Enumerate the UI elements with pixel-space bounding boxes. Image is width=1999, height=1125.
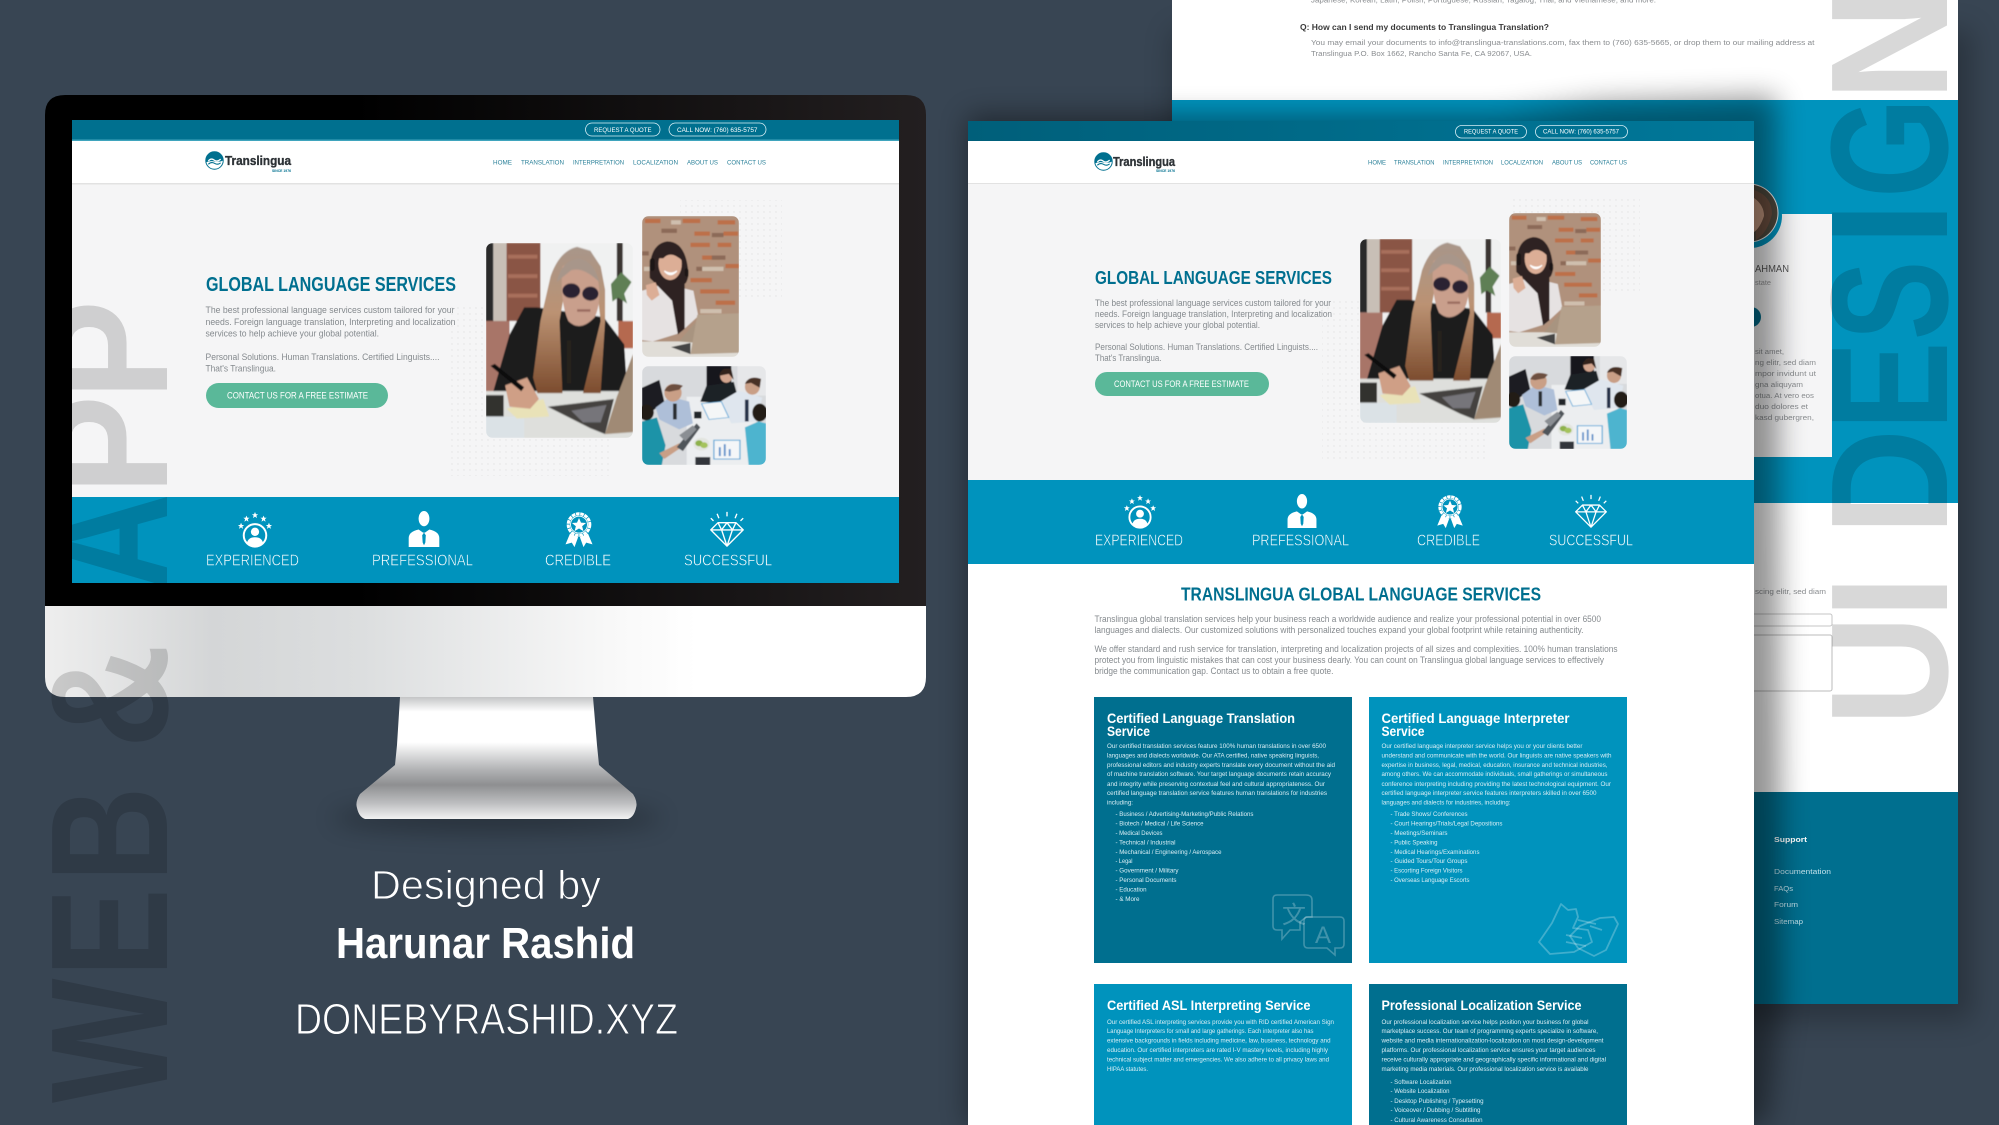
card: certified language translation: languages and dialects worldwide. Our ATA certified, native speaking linguists, [1107, 752, 1319, 760]
icon: experienced [238, 512, 272, 547]
card: certified language interpreter: - Trade Shows/ Conferences [1390, 811, 1468, 818]
top bar: CALL NOW: (760) 635-5757 [677, 127, 758, 134]
hero text: The best professional language services custom tailored for your [206, 305, 454, 315]
feature labels [1095, 532, 1633, 550]
card: certified ASL interpreting: extensive backgrounds in fields including medicine, law, business, technology and [1107, 1038, 1331, 1044]
card: certified language interpreter: Our certified language interpreter service helps you or your clients better [1382, 743, 1583, 750]
card: professional localization: Our professional localization service helps position your business for global [1382, 1019, 1588, 1026]
hero [72, 183, 899, 497]
hero text [1095, 298, 1332, 363]
hero [968, 184, 1754, 480]
watermark: UI DESIGN: E [1795, 341, 1982, 430]
FAQ text on back page [1300, 0, 1815, 58]
testimonial card: gna aliquyam [1755, 382, 1803, 389]
footer support links: FAQs [1774, 884, 1793, 893]
feature labels: SUCCESSFUL [1549, 532, 1633, 550]
card: professional localization: website and media internationalization-localization on most design-development [1381, 1038, 1604, 1044]
monitor stand [356, 697, 637, 819]
FAQ text on back page: Q: How can I send my documents to Translingua Translation? [1300, 22, 1549, 32]
feature labels: CREDIBLE [1417, 532, 1480, 550]
logo: SINCE 1976 [1156, 169, 1175, 173]
hero text: needs. Foreign language translation, Interpreting and localization [1095, 309, 1332, 319]
card: certified language interpreter: - Meetings/Seminars [1390, 830, 1448, 837]
hero text: Personal Solutions. Human Translations. Certified Linguists.... [206, 352, 440, 362]
section intro text: We offer standard and rush service for translation, interpreting and localization projects of all sizes and complexities. 100% human translations [1094, 644, 1618, 654]
text: designed by: Designed by [371, 862, 601, 908]
card: certified language translation: - Medical Devices [1116, 830, 1162, 837]
card: certified ASL interpreting: HIPAA statutes. [1107, 1066, 1148, 1073]
icon: experienced [1124, 495, 1156, 528]
feature band [72, 497, 899, 583]
feature labels: PREFESSIONAL [1252, 532, 1349, 550]
feature labels: EXPERIENCED [1095, 532, 1183, 550]
panel: front web page mockup [968, 121, 1754, 1125]
card: certified language translation: - Personal Documents [1116, 877, 1176, 884]
hero heading: GLOBAL LANGUAGE SERVICES [206, 273, 456, 296]
card: professional localization: Professional Localization Service [1382, 998, 1582, 1013]
card: certified language translation: professional editors and industry experts translate every document without the aid [1107, 762, 1335, 769]
footer support links: Documentation [1774, 867, 1831, 876]
panel: back web page mockup [1172, 0, 1972, 1020]
contact form [1700, 587, 1832, 691]
navigation: HOME [493, 160, 513, 167]
text: designer name: Harunar Rashid [336, 919, 635, 968]
card: certified language translation: - & More [1116, 896, 1140, 903]
hero text: That's Translingua. [1095, 353, 1162, 363]
feature labels: CREDIBLE [545, 552, 611, 570]
navigation: INTERPRETATION [573, 160, 624, 167]
testimonial card: state [1755, 278, 1771, 287]
navigation: CONTACT US [727, 160, 767, 167]
card: certified language interpreter: understand and communicate with the world. Our linguists are native speakers with [1382, 752, 1612, 760]
card: certified language interpreter: - Court Hearings/Trials/Legal Depositions [1390, 820, 1502, 828]
card: certified ASL interpreting: Our certified ASL interpreting services provide you with RID certified American Sign [1107, 1019, 1334, 1026]
watermark: WEB & APP: & [17, 644, 203, 748]
top bar [72, 120, 899, 141]
hero button: CONTACT US FOR A FREE ESTIMATE [1114, 379, 1249, 389]
hero button [206, 383, 388, 408]
front page shadow [968, 96, 1782, 1125]
card: certified language interpreter: languages and dialects for industries, including: [1382, 800, 1511, 806]
photo: interpreter with headset [642, 216, 739, 357]
card: certified language translation: - Legal [1116, 858, 1132, 865]
card: certified language interpreter: certified language interpreter service features interpreters skilled in over 6500 [1382, 790, 1597, 797]
hero text [206, 305, 456, 374]
photo: woman at laptop [486, 243, 633, 438]
hero text: The best professional language services custom tailored for your [1095, 298, 1331, 308]
card: certified language translation: Certified Language Translation [1107, 711, 1295, 726]
watermark: UI DESIGN [1795, 0, 1983, 726]
testimonial card: otua. At vero eos [1755, 393, 1815, 400]
icon: translate speech bubbles: 文 [1282, 902, 1306, 929]
watermark: WEB & APP: P [17, 300, 203, 400]
hero text: needs. Foreign language translation, Interpreting and localization [206, 317, 456, 327]
section intro text: protect you from linguistic mistakes that can cost your business dearly. You can count on Translingua global language services to effectively [1094, 655, 1604, 665]
FAQ text on back page: Translingua P.O. Box 1662, Rancho Santa Fe, CA 92067, USA. [1311, 51, 1532, 58]
watermark: UI DESIGN: U [1797, 615, 1983, 726]
footer support links: Sitemap [1774, 917, 1803, 926]
card: certified language translation: Our certified translation services feature 100% human translations in over 6500 [1107, 743, 1326, 750]
card: certified language interpreter: conference interpreting including providing the latest technological equipment. Our [1382, 781, 1612, 788]
section intro text: bridge the communication gap. Contact us to obtain a free quote. [1094, 666, 1334, 676]
text: website: DONEBYRASHID.XYZ [295, 995, 678, 1044]
card: professional localization: - Cultural Awareness Consultation [1390, 1117, 1483, 1124]
section intro text: Translingua global translation services help your business reach a worldwide audience and realize your professional potential in over 6500 [1094, 614, 1601, 624]
testimonial card: duo dolores et [1755, 404, 1808, 411]
navigation: ABOUT US [1552, 160, 1583, 166]
card: certified language translation: Service [1107, 724, 1150, 739]
feature band [968, 480, 1754, 564]
navigation: TRANSLATION [521, 160, 564, 167]
navigation: LOCALIZATION [633, 160, 678, 167]
card: certified ASL interpreting: education. Our certified interpreters are rated I-V mastery levels, including highly [1107, 1047, 1329, 1054]
card: certified language interpreter: expertise in business, legal, medical, education, insurance and technical industries, [1382, 762, 1608, 769]
watermark: WEB & APP: A [17, 494, 203, 590]
watermark: WEB & APP: B [16, 787, 203, 882]
hero heading: GLOBAL LANGUAGE SERVICES [1095, 268, 1332, 288]
monitor chin [45, 606, 926, 697]
watermark: UI DESIGN: S [1796, 261, 1983, 340]
navigation [493, 160, 767, 167]
card: certified ASL interpreting: Certified ASL Interpreting Service [1107, 998, 1311, 1013]
logo: Translingua [1113, 155, 1176, 169]
card: certified language translation: - Technical / Industrial [1116, 840, 1176, 846]
card: certified language interpreter [1369, 697, 1627, 963]
photo: team meeting [639, 366, 767, 465]
watermark: UI DESIGN: I [1796, 202, 1983, 246]
screen: website home page [72, 120, 899, 583]
photo: interpreter with headset [1509, 213, 1601, 347]
hero text: services to help achieve your global potential. [206, 328, 379, 338]
card: certified language translation: - Mechanical / Engineering / Aerospace [1116, 849, 1222, 856]
card: professional localization: - Website Localization [1390, 1088, 1450, 1095]
hero text: That's Translingua. [206, 364, 276, 374]
logo: SINCE 1976 [272, 169, 291, 173]
feature labels: EXPERIENCED [206, 552, 299, 570]
card: certified language translation: - Business / Advertising-Marketing/Public Relations [1116, 811, 1254, 818]
card: professional localization [1369, 984, 1627, 1125]
card: certified language interpreter: - Public Speaking [1390, 840, 1438, 846]
navigation: ABOUT US [687, 160, 719, 167]
top bar: CALL NOW: (760) 635-5757 [1543, 129, 1619, 136]
card: certified language translation: - Government / Military [1116, 868, 1179, 874]
card: certified language interpreter: Certified Language Interpreter [1382, 711, 1570, 726]
icon: professional [1288, 494, 1316, 528]
logo: Translingua [225, 154, 292, 168]
navigation [1368, 160, 1628, 166]
card: professional localization: - Voiceover / Dubbing / Subtitling [1390, 1107, 1481, 1114]
card: certified ASL interpreting [1094, 984, 1352, 1125]
watermark: WEB & APP: W [16, 978, 203, 1103]
card: professional localization: marketplace success. Our team of programming experts specialize in software, [1382, 1028, 1598, 1035]
hero button: CONTACT US FOR A FREE ESTIMATE [227, 390, 368, 400]
logo [1095, 153, 1176, 173]
monitor bezel [45, 95, 926, 606]
icon: successful [1576, 495, 1606, 527]
testimonial card [1700, 184, 1832, 457]
feature labels: SUCCESSFUL [684, 552, 772, 570]
card: professional localization: marketing media materials. Our professional localization service is available [1382, 1066, 1589, 1073]
card: certified language interpreter: - Medical Hearings/Examinations [1390, 849, 1480, 856]
card: certified language interpreter: - Guided Tours/Tour Groups [1390, 858, 1468, 865]
watermark: UI DESIGN: D [1797, 429, 1983, 535]
footer support links [1774, 835, 1831, 926]
icon: signing hands [1539, 904, 1618, 956]
photo: woman at laptop [1360, 239, 1501, 423]
hero text: services to help achieve your global potential. [1095, 320, 1260, 330]
card: certified language translation: - Education [1116, 886, 1147, 894]
navigation: TRANSLATION [1394, 160, 1435, 166]
avatar [1718, 184, 1782, 248]
watermark: WEB & APP: P [17, 395, 203, 494]
card: certified language translation: certified language translation service features human translations for industries [1107, 790, 1327, 797]
section intro text: languages and dialects. Our customized solutions with personalized touches expand your global footprint while retaining authenticity. [1094, 625, 1584, 635]
testimonial card: kasd gubergren, [1755, 415, 1814, 422]
designer credit [295, 862, 678, 1044]
icon: translate speech bubbles [1273, 895, 1344, 955]
hero button [1095, 372, 1269, 396]
footer support links: Forum [1774, 900, 1798, 909]
icon: translate speech bubbles: A [1315, 922, 1331, 949]
card: certified language interpreter: - Overseas Language Escorts [1390, 877, 1470, 884]
top bar: REQUEST A QUOTE [594, 127, 652, 134]
card: certified language translation: and integrity while preserving contextual feel and cultural appropriateness. Our [1107, 781, 1326, 788]
watermark: WEB & APP [15, 300, 203, 1103]
watermark: UI DESIGN: I [1796, 575, 1983, 619]
watermark: UI DESIGN: G [1796, 98, 1983, 198]
testimonial card: mpor invidunt ut [1755, 371, 1816, 378]
card: certified language translation: of machine translation software. Your target language documents retain accuracy [1107, 771, 1332, 778]
card: professional localization: - Desktop Publishing / Typesetting [1390, 1098, 1484, 1105]
card: professional localization: - Software Localization [1390, 1079, 1452, 1086]
feature labels [206, 552, 772, 570]
card: certified ASL interpreting: Language Interpreters for small and large gatherings. Each interpreter also has [1107, 1028, 1314, 1035]
card: certified ASL interpreting: technical subject matter and emergencies. We also adhere to all privacy laws and [1107, 1056, 1329, 1064]
photo: team meeting [1506, 356, 1628, 449]
icon: credible [1437, 497, 1463, 528]
top bar: REQUEST A QUOTE [1464, 129, 1519, 136]
footer support links: Support [1774, 835, 1808, 844]
top bar [968, 121, 1754, 141]
section intro text [1094, 614, 1618, 676]
icon: credible [566, 514, 592, 547]
FAQ text on back page: You may email your documents to info@translingua-translations.com, fax them to (760) 635-5665, or drop them to our mailing address at [1311, 40, 1815, 47]
card: certified language interpreter: among others. We can accommodate individuals, small gatherings or simultaneous [1382, 771, 1608, 778]
testimonial card: AHMAN [1755, 264, 1789, 275]
contact form: scing elitr, sed diam [1755, 587, 1826, 596]
icon: successful [711, 512, 743, 546]
card: professional localization: platforms. Our professional localization service ensures your target audiences [1382, 1047, 1596, 1054]
watermark: WEB & APP: E [15, 888, 202, 977]
logo [206, 152, 292, 173]
icon: professional [409, 511, 439, 547]
card: professional localization: receive culturally appropriate and geographically specific informational and digital [1382, 1056, 1606, 1064]
card: certified language translation: - Biotech / Medical / Life Science [1116, 820, 1204, 828]
section heading: TRANSLINGUA GLOBAL LANGUAGE SERVICES [1181, 584, 1541, 605]
navigation: LOCALIZATION [1501, 160, 1543, 166]
card: certified language interpreter: - Escorting Foreign Visitors [1390, 868, 1462, 874]
hero text: Personal Solutions. Human Translations. Certified Linguists.... [1095, 342, 1318, 352]
monitor: iMac style display [45, 95, 926, 831]
navigation: INTERPRETATION [1443, 160, 1493, 166]
card: certified language translation [1094, 697, 1352, 963]
navigation: HOME [1368, 160, 1387, 166]
card: certified language translation: including: [1107, 800, 1133, 806]
feature labels: PREFESSIONAL [372, 552, 473, 570]
testimonial card: sit amet, [1755, 349, 1784, 356]
navigation: CONTACT US [1590, 160, 1628, 166]
card: certified language interpreter: Service [1382, 724, 1425, 739]
testimonial card: ng elitr, sed diam [1755, 360, 1816, 367]
